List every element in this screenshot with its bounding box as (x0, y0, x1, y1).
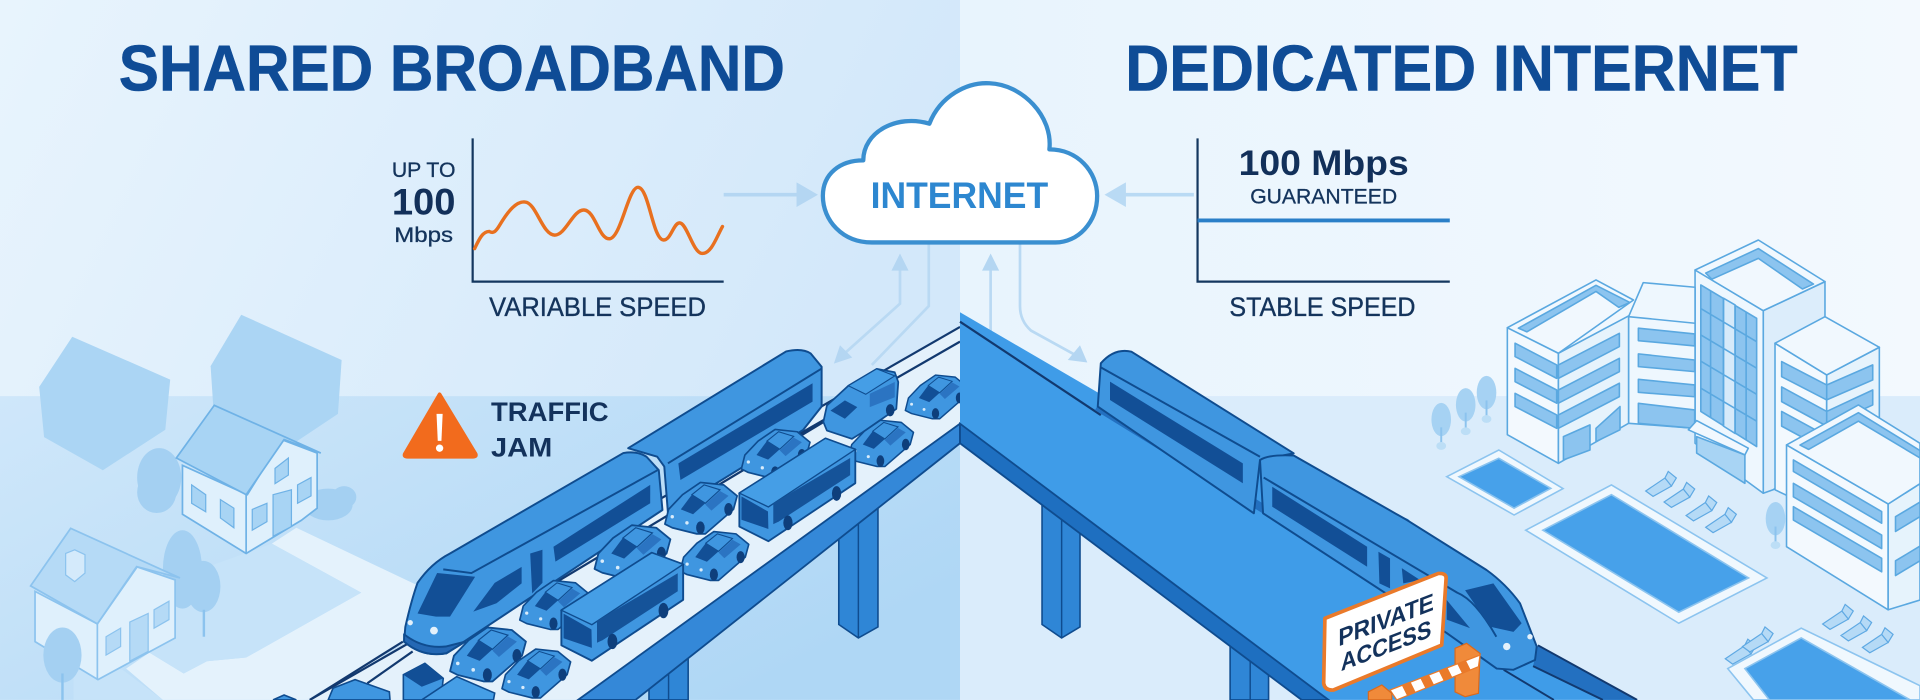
label: traffic jam: TRAFFIC (491, 397, 609, 427)
building: right block (1775, 317, 1879, 514)
label: traffic jam (491, 397, 609, 463)
icon: cloud (823, 83, 1097, 242)
pools: campus (1447, 450, 1920, 700)
arrow: left chart to cloud (724, 186, 814, 204)
sign: private access (1324, 573, 1446, 690)
vehicles: traffic jam (273, 369, 967, 700)
chart: stable speed: GUARANTEED (1250, 185, 1397, 208)
background: left panel (0, 0, 960, 700)
chart: variable speed (392, 138, 724, 322)
building: left block (1507, 280, 1633, 463)
barrier: boom gate (1368, 643, 1480, 700)
label: internet: INTERNET (871, 175, 1049, 216)
bridge: dedicated road (960, 312, 1637, 700)
chart: variable speed: VARIABLE SPEED (489, 292, 706, 322)
icon: warning triangle (404, 394, 476, 457)
building: front block (1787, 405, 1920, 610)
chart: variable speed: 100 (392, 181, 456, 222)
background: right panel (960, 0, 1920, 700)
tower canopy (1688, 421, 1748, 483)
building: tower (1695, 240, 1825, 493)
arrows: cloud to roads (834, 242, 1087, 365)
title: dedicated internet: DEDICATED INTERNET (1125, 32, 1798, 105)
chart: stable speed: 100 Mbps (1239, 143, 1409, 183)
buildings: office campus (1507, 240, 1920, 610)
chart: stable speed: STABLE SPEED (1229, 292, 1416, 322)
chart: variable speed: UP TO (392, 159, 456, 182)
title: shared broadband: SHARED BROADBAND (119, 32, 785, 105)
trees: campus (1431, 376, 1785, 549)
building: slab (1629, 283, 1695, 428)
chart: variable speed: Mbps (394, 224, 453, 247)
train: dedicated track (1098, 351, 1537, 670)
bridge: shared road (306, 327, 960, 700)
sign: private access: ACCESS (1341, 615, 1431, 677)
sign: private access: PRIVATE (1338, 589, 1434, 652)
train: shared track (404, 350, 822, 654)
houses: residential neighbourhood (31, 315, 356, 700)
loungers: pool deck (1646, 471, 1893, 664)
chart: stable speed (1198, 138, 1450, 322)
label: traffic jam: JAM (491, 433, 552, 463)
arrow: right chart to cloud (1108, 186, 1194, 204)
